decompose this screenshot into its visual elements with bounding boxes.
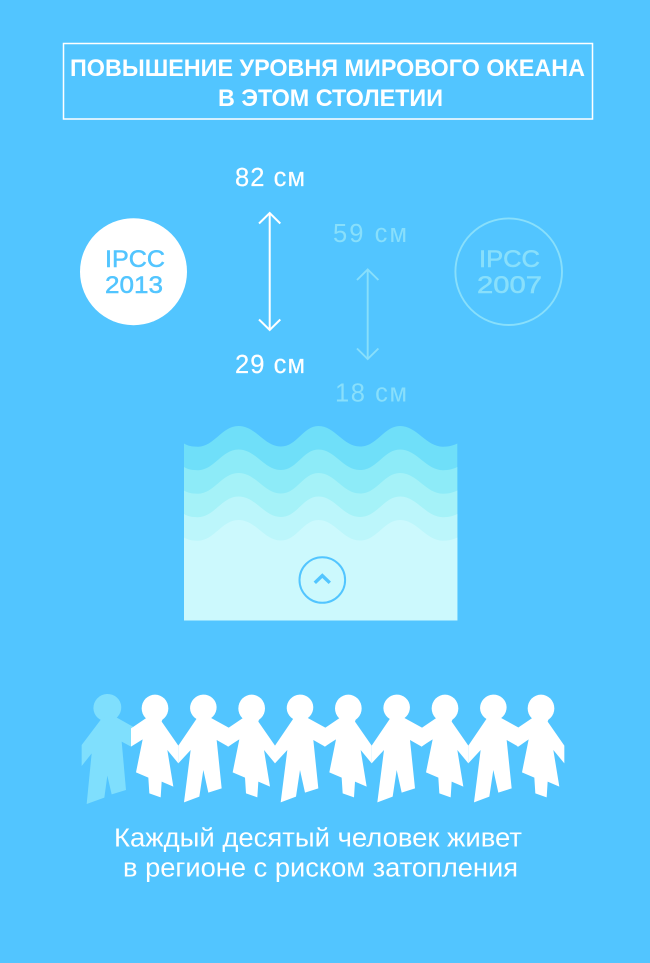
figure: highlighted person [82,689,133,804]
caption: в регионе с риском затопления [123,854,518,882]
badge: IPCC 2007 [455,218,562,325]
label: 82 cm: 82 см [235,164,305,192]
label: 59 cm: 59 см [333,220,407,248]
badge: IPCC 2013: IPCC [105,246,165,273]
arrow: 2007 range [357,270,378,359]
title box: В ЭТОМ СТОЛЕТИИ [218,85,443,112]
badge: IPCC 2007: 2007 [477,272,542,299]
title box [64,44,592,119]
figures: white people [131,690,564,802]
icon: up chevron in circle [300,557,345,603]
arrow: 2013 range [259,213,280,330]
title box: ПОВЫШЕНИЕ УРОВНЯ МИРОВОГО ОКЕАНА [70,55,585,82]
label: 18 cm: 18 см [335,380,407,408]
caption [114,825,522,882]
label: 29 cm: 29 см [235,351,305,379]
caption: Каждый десятый человек живет [114,825,522,853]
badge: IPCC 2007: IPCC [479,246,540,273]
paper people chain [82,689,564,804]
badge: IPCC 2013 [80,218,187,325]
water waves [184,426,457,620]
badge: IPCC 2013: 2013 [105,272,163,299]
